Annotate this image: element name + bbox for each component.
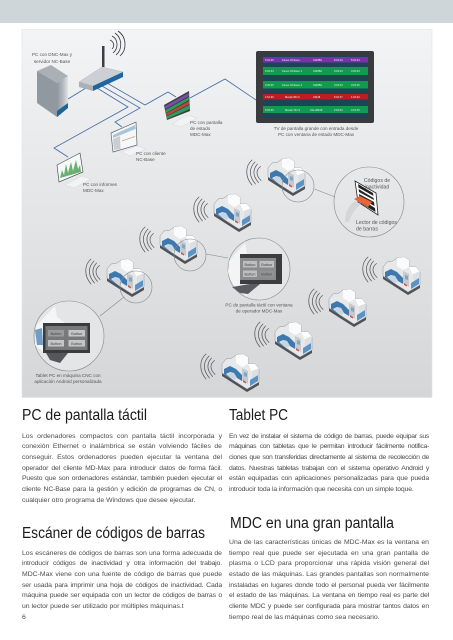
text block: MDC en una gran pantalla: tiempo real que puede ser ejecutada en una gran pantalla de xyxy=(229,550,429,557)
panel: large TV screen: 6:02:37 xyxy=(334,95,343,99)
panel: large TV screen: 3:01:35 xyxy=(351,108,360,112)
callout: barcode reader machine: inactividad xyxy=(365,184,389,190)
panel: large TV screen: 1:02:32 xyxy=(351,95,360,99)
panel: large TV screen: 1:51:36 xyxy=(265,95,274,99)
label: reports PC: MDC-Max xyxy=(83,188,104,193)
text block: MDC en una gran pantalla: cliente MDC y puede ser configurada para mostrar tantos datos en xyxy=(229,603,429,610)
label: reports PC: PC con informes xyxy=(83,182,118,187)
label: status screen PC: MDC-Max xyxy=(190,132,211,137)
text block: MDC en una gran pantalla: plasma o LCD para proporcionar una rápida visión general del xyxy=(229,560,429,567)
text block: Tablet PC: En vez de instalar el sistema de código de barras, puede equipar sus xyxy=(229,432,429,440)
text block: PC de pantalla táctil xyxy=(22,432,222,504)
icon: server xyxy=(37,65,68,117)
callout: barcode reader machine: de barras xyxy=(356,226,378,232)
label: reports PC xyxy=(83,182,118,193)
text block: MDC en una gran pantalla: el estado de las máquinas. La ventana en tiempo real es parte del xyxy=(229,592,429,599)
label: TV screen xyxy=(274,126,359,137)
text block: Tablet PC: introducir toda la información que necesita con un simple toque. xyxy=(229,486,414,493)
heading: MDC en una gran pantalla: MDC en una gran pantalla xyxy=(230,515,394,532)
callout: barcode reader machine: Lector de códigos xyxy=(356,220,397,226)
text block: Escáner de códigos de barras: 6 xyxy=(22,614,26,621)
label: server xyxy=(32,52,73,64)
icon: wireless router xyxy=(79,31,125,91)
text block: MDC en una gran pantalla: instaladas en lugares donde todo el personal pueda ver fácilmente xyxy=(229,582,429,589)
text block: PC de pantalla táctil: operador del cliente MD-Max para introducir datos de forma fácil. xyxy=(22,465,222,472)
heading: Escáner de códigos de barras: Escáner de códigos de barras xyxy=(22,525,205,542)
text block: MDC en una gran pantalla: estado de las máquinas. Las grandes pantallas son normalmente xyxy=(229,571,429,578)
top band xyxy=(0,0,453,23)
label: client PC: PC con cliente xyxy=(136,151,166,156)
panel: large TV screen: 5:02:35 xyxy=(265,58,274,62)
label: TV screen: TV de pantalla grande con entrada desde xyxy=(274,126,359,131)
text block: PC de pantalla táctil: conexión Ethernet o inalámbrica se están volviendo fáciles de xyxy=(22,443,222,450)
panel: large TV screen: 3:02:35 xyxy=(351,83,360,87)
callout: barcode reader machine: Códigos de xyxy=(364,178,390,184)
callout: tablet PC machine: Button xyxy=(51,342,61,346)
label: tablet PC xyxy=(34,373,102,384)
text block: PC de pantalla táctil: Puesto que son ordenadores estándar, también pueden ejecutar el xyxy=(22,475,222,482)
text block: Escáner de códigos de barras xyxy=(22,550,222,621)
panel: large TV screen: 2:02:34 xyxy=(334,108,343,112)
text block: PC de pantalla táctil: Los ordenadores compactos con pantalla táctil incorporada y xyxy=(22,432,222,440)
text block: Tablet PC: están equipadas con aplicaciones personalizadas para que pueda xyxy=(229,475,429,482)
icon: reports PC xyxy=(57,153,91,188)
panel: large TV screen: 3448B2 xyxy=(313,69,323,73)
callout: touch screen PC machine: Button xyxy=(245,263,255,267)
text block: MDC en una gran pantalla: Una de las características únicas de MDC-Max es la ventana en xyxy=(229,539,429,546)
label: tablet PC: Tablet PC en máquina CNC con xyxy=(35,373,101,378)
icon: status screen PC xyxy=(164,91,197,127)
text block: Escáner de códigos de barras: introducir códigos de inactividad y otra información del trabajo. xyxy=(22,560,222,567)
panel: large TV screen: 3:02:34 xyxy=(265,69,274,73)
label: server: servidor NC-Base xyxy=(34,59,71,64)
callout: touch screen PC machine: Button xyxy=(245,272,255,276)
panel: large TV screen: 34a 48648 xyxy=(310,108,323,112)
panel: large TV screen: 34448 xyxy=(313,95,321,99)
panel: large TV screen xyxy=(256,51,374,123)
panel: large TV screen: 5:02:33 xyxy=(351,58,360,62)
panel: large TV screen: 3448B2 xyxy=(313,58,323,62)
label: client PC xyxy=(136,151,166,162)
label: status screen PC: PC con pantalla xyxy=(190,120,223,125)
label: touch screen PC xyxy=(225,302,293,314)
panel: large TV screen: 3:02:34 xyxy=(334,69,343,73)
callout: tablet PC machine: Button xyxy=(71,332,82,336)
callout: tablet PC machine xyxy=(34,259,152,371)
machines with wireless signal xyxy=(201,257,420,392)
panel: large TV screen: 5:36:35 xyxy=(265,108,274,112)
text block: Escáner de códigos de barras: MDC-Max viene con una fuente de código de barras que puede xyxy=(22,571,222,578)
callout: touch screen PC machine: Button xyxy=(261,263,272,267)
panel: diagram background xyxy=(22,30,432,398)
panel: large TV screen: Mazak 801 F xyxy=(285,95,300,99)
text block: PC de pantalla táctil: cliente NC-Base para la gestión y edición de programas de CN, o xyxy=(22,486,222,493)
text block: Escáner de códigos de barras: Los escáneres de códigos de barras son una forma adecuada de xyxy=(22,550,222,556)
text block: PC de pantalla táctil: conseguir. Estos ordenadores pueden ejecutar la ventana del xyxy=(22,454,222,461)
label: touch screen PC: PC de pantalla táctil con ventana xyxy=(225,302,293,308)
text block: Tablet PC: ciones que son transferidas directamente al sistema de recolección de xyxy=(229,454,429,461)
text block: PC de pantalla táctil: cualquier otro programa de Windows que desee ejecutar. xyxy=(22,497,195,504)
text block: Tablet PC: datos. Nuestras tabletas trabajan con el sistema operativo Android y xyxy=(229,465,429,472)
callout: tablet PC machine: Button xyxy=(71,342,82,346)
icon: client PC xyxy=(111,122,146,156)
label: status screen PC xyxy=(190,120,223,137)
panel: large TV screen: Fanuc 18i Exec 2 xyxy=(282,83,303,87)
panel: large TV screen: 3:02:33 xyxy=(351,69,360,73)
label: client PC: NC-Base xyxy=(136,157,155,162)
label: TV screen: PC con ventana de estado MDC-Max xyxy=(278,132,355,137)
callout: barcode reader machine xyxy=(247,158,404,237)
label: tablet PC: aplicación Android personalizada xyxy=(34,379,102,384)
panel: large TV screen: 8:02:34 xyxy=(334,58,343,62)
text block: Tablet PC xyxy=(229,432,430,493)
machine with wireless signal xyxy=(194,194,251,232)
text block: Escáner de códigos de barras: ser usada para imprimir una hoja de códigos de inactividad. Cada xyxy=(22,582,222,589)
callout: touch screen PC machine: Button xyxy=(261,272,272,276)
text block: Tablet PC: máquinas con tabletas que le permitan introducir fácilmente notifica- xyxy=(229,443,429,450)
panel: large TV screen: 3:36:35 xyxy=(265,83,274,87)
panel: large TV screen: 3448B2 xyxy=(313,83,323,87)
heading: PC de pantalla táctil: PC de pantalla táctil xyxy=(22,407,147,424)
callout: touch screen PC machine xyxy=(140,226,290,300)
label: touch screen PC: de operador MDC-Max xyxy=(236,308,283,314)
text block: Escáner de códigos de barras: máquina puede ser equipada con un lector de códigos de barras o xyxy=(22,592,222,599)
label: status screen PC: de estado xyxy=(190,126,211,131)
panel: large TV screen: Fanuc 18i Exec xyxy=(282,58,301,62)
heading: Tablet PC: Tablet PC xyxy=(229,407,288,424)
panel: large TV screen: 3:02:34 xyxy=(334,83,343,87)
network cables xyxy=(54,79,256,157)
callout: tablet PC machine: Button xyxy=(51,332,61,336)
panel: large TV screen: Mazak 701 S xyxy=(285,108,300,112)
text block: MDC en una gran pantalla xyxy=(229,539,429,621)
text block: MDC en una gran pantalla: tiempo real de las máquinas como sea necesario. xyxy=(229,614,380,621)
panel: large TV screen: Fanuc 18i Exec 1 xyxy=(282,69,303,73)
label: server: PC con DNC-Max y xyxy=(32,52,73,57)
text block: Escáner de códigos de barras: un lector puede ser utilizado por múltiples máquinas.t xyxy=(22,603,184,610)
